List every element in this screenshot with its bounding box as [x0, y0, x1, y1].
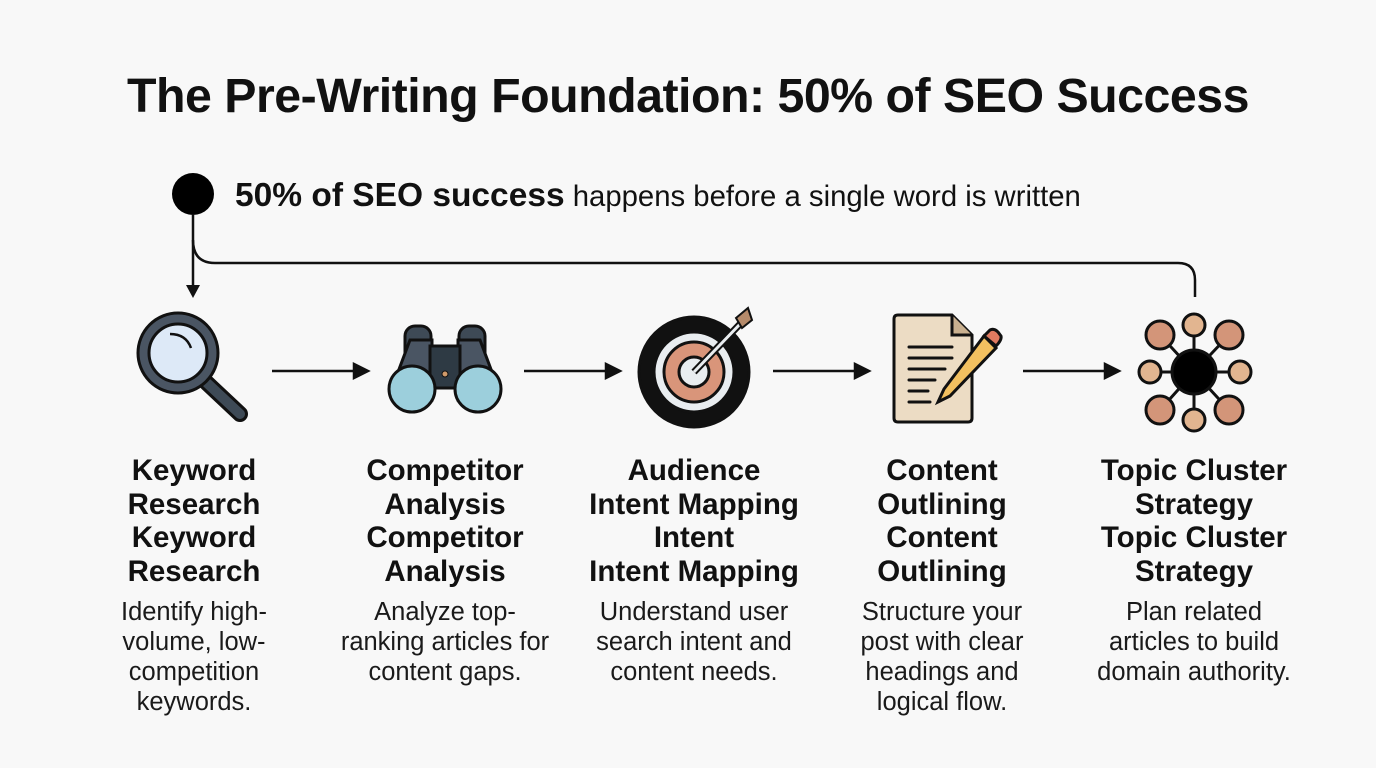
step 5: topic cluster strategy: Plan related	[1126, 598, 1262, 626]
step 4: content outlining: Structure your	[862, 598, 1022, 626]
step 1: keyword research	[121, 454, 267, 716]
step 5: topic cluster strategy: Strategy	[1135, 488, 1253, 520]
step 5: topic cluster strategy: Topic Cluster	[1101, 454, 1287, 487]
icon: target	[639, 308, 752, 427]
icon: binoculars	[389, 326, 501, 412]
step 4: content outlining: Content	[886, 521, 998, 554]
step 1: keyword research: Research	[128, 488, 260, 520]
step 1: keyword research: Keyword	[132, 521, 256, 554]
step 1: keyword research: Identify high-	[121, 598, 267, 626]
step 3: audience intent mapping	[589, 454, 799, 686]
step 2: competitor analysis: ranking articles for	[341, 628, 549, 656]
step 2: competitor analysis: Competitor	[366, 521, 524, 554]
step 2: competitor analysis: content gaps.	[368, 658, 522, 686]
step 2: competitor analysis: Analyze top-	[374, 598, 516, 626]
step 3: audience intent mapping: content needs.	[610, 658, 778, 686]
step 3: audience intent mapping: Intent Mapping	[589, 488, 799, 520]
step 1: keyword research: Research	[128, 554, 260, 588]
step 2: competitor analysis: Competitor	[366, 454, 524, 487]
step 4: content outlining: Outlining	[877, 488, 1007, 520]
step 5: topic cluster strategy	[1097, 454, 1291, 686]
step 3: audience intent mapping: Audience	[628, 454, 760, 487]
step 1: keyword research: keywords.	[137, 688, 251, 716]
step 2: competitor analysis: Analysis	[384, 488, 506, 520]
step 4: content outlining: Outlining	[877, 554, 1007, 588]
title: The Pre-Writing Foundation: 50% of SEO Success	[127, 69, 1249, 123]
step arrows	[272, 364, 1119, 378]
icon: magnifier	[138, 313, 240, 414]
start dot	[172, 173, 214, 215]
connector line	[193, 215, 1195, 297]
step 5: topic cluster strategy: articles to build	[1109, 628, 1279, 656]
step 3: audience intent mapping: Understand user	[600, 598, 788, 626]
step 5: topic cluster strategy: domain authority.	[1097, 658, 1291, 686]
step 4: content outlining: headings and	[865, 658, 1019, 686]
icon: document with pencil	[894, 315, 1001, 422]
step 1: keyword research: volume, low-	[122, 628, 266, 656]
arrow heads down	[186, 285, 200, 298]
step 3: audience intent mapping: Intent	[654, 521, 734, 554]
step 5: topic cluster strategy: Strategy	[1135, 554, 1253, 588]
step 2: competitor analysis	[341, 454, 549, 686]
step 1: keyword research: Keyword	[132, 454, 256, 487]
step 4: content outlining: logical flow.	[877, 688, 1007, 716]
step 4: content outlining	[860, 454, 1024, 716]
step 4: content outlining: Content	[886, 454, 998, 487]
step 4: content outlining: post with clear	[860, 628, 1024, 656]
step 5: topic cluster strategy: Topic Cluster	[1101, 521, 1287, 554]
icon: topic cluster network	[1139, 314, 1251, 431]
step 1: keyword research: competition	[129, 658, 259, 686]
step 2: competitor analysis: Analysis	[384, 554, 506, 588]
subtitle statement: 50% of SEO success happens before a single word is written	[235, 177, 1081, 214]
step 3: audience intent mapping: search intent and	[596, 628, 792, 656]
step 3: audience intent mapping: Intent Mapping	[589, 554, 799, 588]
